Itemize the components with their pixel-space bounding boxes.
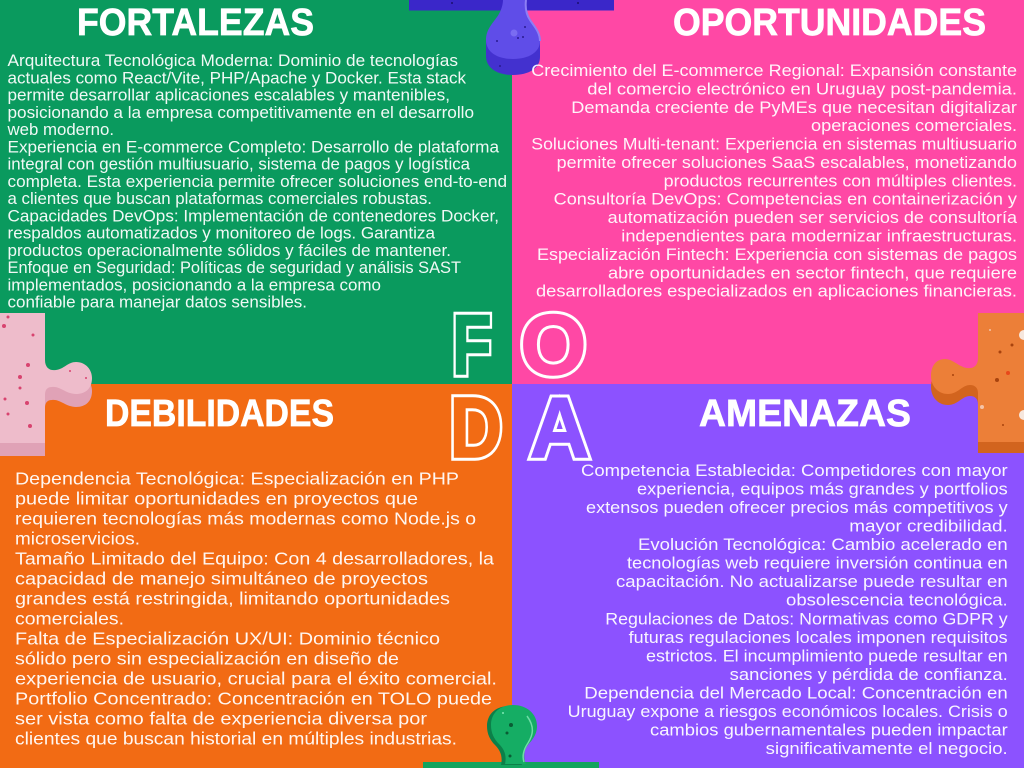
heading: debilidades: DEBILIDADES [105,393,334,435]
text block: amenazas: capacitación. No actualizarse puede resultar en [616,572,1008,591]
heading: fortalezas: FORTALEZAS [77,2,314,44]
panel: debilidades background [0,384,512,768]
text block: debilidades: ser vista como falta de experiencia diversa por [15,709,427,729]
text block: debilidades: requieren tecnologías más modernas como Node.js o [15,509,476,529]
text block: fortalezas [6,52,507,312]
text block: amenazas: experiencia, equipos más grandes y portfolios [637,480,1008,498]
text block: fortalezas: Experiencia en E-commerce Completo: Desarrollo de plataforma [8,138,499,156]
text block: oportunidades [531,61,1018,301]
text block: oportunidades: automatización pueden ser servicios de consultoría [608,208,1018,227]
text block: amenazas: Regulaciones de Datos: Normativas como GDPR y [605,609,1008,628]
text block: fortalezas: respaldos automatizados y monitoreo de logs. Garantiza [8,225,435,243]
text block: debilidades: Tamaño Limitado del Equipo: Con 4 desarrolladores, la [15,549,494,569]
text block: amenazas: obsolescencia tecnológica. [786,591,1008,610]
text block: fortalezas: Capacidades DevOps: Implementación de contenedores Docker, [8,207,499,225]
text block: debilidades: Dependencia Tecnológica: Especialización en PHP [15,469,459,489]
text block: oportunidades: Soluciones Multi-tenant: Experiencia en sistemas multiusuario [531,135,1017,154]
text block: amenazas: Uruguay expone a riesgos económicos locales. Crisis o [568,702,1008,721]
letter F: F [452,298,492,393]
icon: green puzzle piece [423,705,599,768]
text block: fortalezas: implementados, posicionando a la empresa como [8,276,381,294]
text block: oportunidades: productos recurrentes con múltiples clientes. [664,171,1017,190]
text block: fortalezas: permite desarrollar aplicaciones escalables y mantenibles, [8,86,450,104]
text block: amenazas: sanciones y pérdida de confianza. [730,665,1008,684]
text block: debilidades: clientes que buscan historial en múltiples industrias. [15,729,457,749]
text block: oportunidades: independientes para modernizar infraestructuras. [621,226,1017,246]
text block: fortalezas: productos operacionalmente sólidos y fáciles de mantener. [8,242,451,260]
text block: amenazas: mayor credibilidad. [849,517,1008,536]
text block: fortalezas: confiable para manejar datos sensibles. [8,294,307,312]
text block: amenazas [568,461,1008,758]
text block: debilidades: comerciales. [15,609,124,629]
text block: fortalezas: Arquitectura Tecnológica Moderna: Dominio de tecnologías [8,52,458,70]
text block: oportunidades: operaciones comerciales. [811,116,1017,135]
text block: amenazas: Competencia Establecida: Competidores con mayor [581,461,1008,480]
text block: debilidades: experiencia de usuario, crucial para el éxito comercial. [15,669,497,689]
text block: debilidades [15,469,497,749]
text block: oportunidades: Crecimiento del E-commerce Regional: Expansión constante [531,61,1017,80]
letter F: F [452,298,492,393]
text block: debilidades: capacidad de manejo simultáneo de proyectos [15,569,428,589]
text block: debilidades: microservicios. [15,529,140,549]
text block: amenazas: Evolución Tecnológica: Cambio acelerado en [638,535,1008,554]
panel: oportunidades background [512,0,1024,384]
icon: purple puzzle piece [409,0,614,75]
heading: amenazas: AMENAZAS [699,393,911,435]
panel: amenazas background [512,384,1024,768]
text block: oportunidades: Demanda creciente de PyMEs que necesitan digitalizar [571,98,1017,117]
text block: amenazas: extensos pueden ofrecer precios más competitivos y [586,498,1008,517]
icon: pink puzzle piece [0,313,92,456]
text block: fortalezas: Enfoque en Seguridad: Políticas de seguridad y análisis SAST [8,259,461,277]
text block: fortalezas: completa. Esta experiencia permite ofrecer soluciones end-to-end [8,173,507,191]
text block: debilidades: sólido pero sin especialización en diseño de [15,649,399,669]
letter D: D [450,381,502,476]
text block: amenazas: significativamente el negocio. [766,739,1008,758]
text block: fortalezas: actuales como React/Vite, PHP/Apache y Docker. Esta stack [8,69,467,87]
text block: amenazas: futuras regulaciones locales imponen requisitos [629,628,1008,647]
text block: oportunidades: abre oportunidades en sector fintech, que requiere [608,263,1017,282]
text block: debilidades: Falta de Especialización UX/UI: Dominio técnico [15,629,440,649]
text block: oportunidades: Especialización Fintech: Experiencia con sistemas de pagos [537,245,1017,264]
text block: debilidades: puede limitar oportunidades en proyectos que [15,489,418,509]
text block: oportunidades: Consultoría DevOps: Competencias en containerización y [554,190,1018,209]
text block: fortalezas: a clientes que buscan plataformas comerciales robustas. [8,190,432,208]
text block: oportunidades: permite ofrecer soluciones SaaS escalables, monetizando [557,153,1017,172]
text block: fortalezas: web moderno. [6,121,114,139]
letter O: O [520,298,586,393]
text block: amenazas: cambios gubernamentales pueden impactar [650,720,1008,740]
text block: fortalezas: integral con gestión multiusuario, sistema de pagos y logística [8,156,470,174]
text block: debilidades: grandes está restringida, limitando oportunidades [15,589,450,609]
text block: amenazas: estrictos. El incumplimiento puede resultar en [646,646,1008,665]
letter A: A [530,381,590,476]
letter O: O [520,298,586,393]
text block: oportunidades: del comercio electrónico en Uruguay post-pandemia. [587,79,1017,98]
letter A: A [530,381,590,476]
text block: amenazas: Dependencia del Mercado Local: Concentración en [584,683,1008,702]
text block: amenazas: tecnologías web requiere inversión continua en [627,554,1008,573]
letter D: D [450,381,502,476]
text block: debilidades: Portfolio Concentrado: Concentración en TOLO puede [15,689,492,709]
heading: oportunidades: OPORTUNIDADES [673,2,986,44]
text block: oportunidades: desarrolladores especializados en aplicaciones financieras. [536,282,1017,301]
icon: orange puzzle piece [931,313,1024,453]
text block: fortalezas: posicionando a la empresa competitivamente en el desarrollo [8,104,474,122]
panel: fortalezas background [0,0,512,384]
